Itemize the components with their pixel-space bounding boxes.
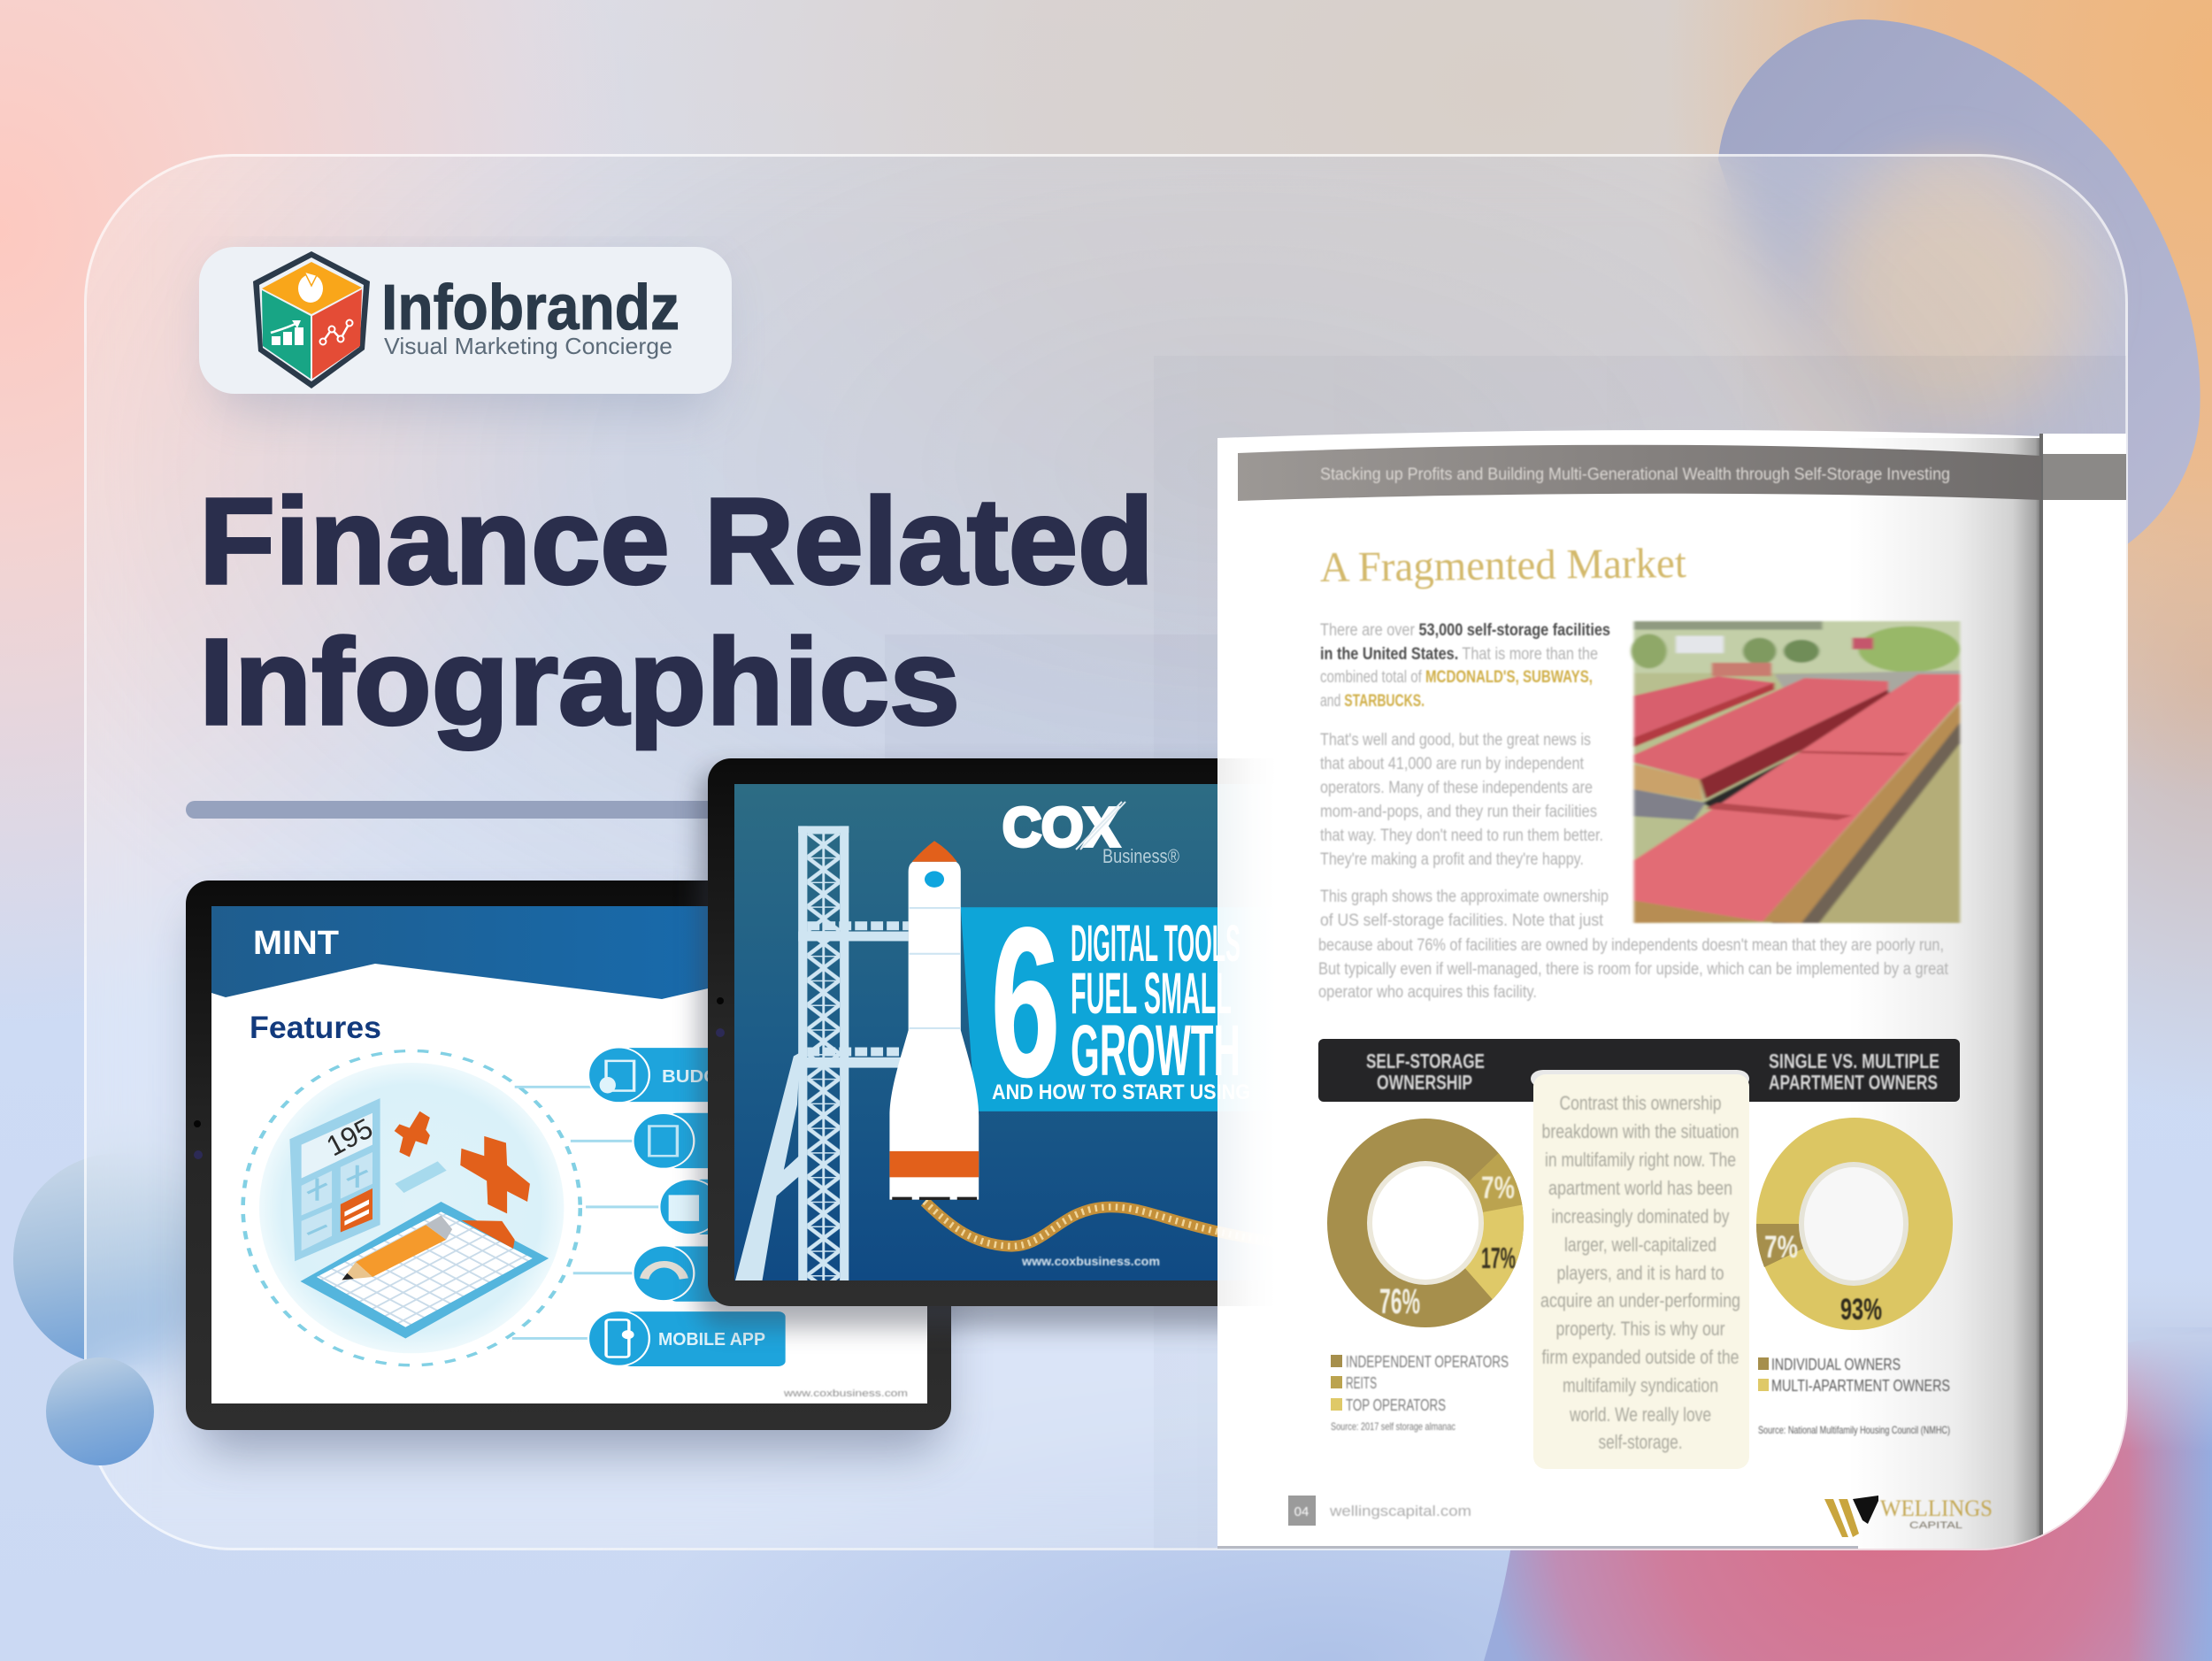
donut headers: APARTMENT OWNERS bbox=[1769, 1071, 1938, 1094]
tablet: Cox Business digital tools: FUEL SMALL bbox=[1071, 960, 1232, 1026]
Mint footer url: www.coxbusiness.com bbox=[783, 1388, 908, 1399]
donut headers: OWNERSHIP bbox=[1377, 1071, 1472, 1094]
body copy: combined total of MCDONALD'S, SUBWAYS, bbox=[1320, 668, 1593, 687]
title: Finance Related bbox=[199, 473, 1154, 610]
body copy: There are over 53,000 self-storage facilities bbox=[1320, 621, 1610, 640]
Business label: Business® bbox=[1102, 845, 1179, 867]
header bar bbox=[1238, 445, 2041, 501]
logo card bbox=[199, 247, 732, 411]
page number and website: 04 bbox=[1294, 1504, 1309, 1519]
cream callout: players, and it is hard to bbox=[1557, 1262, 1724, 1284]
small sphere bbox=[46, 1357, 154, 1465]
body copy: and STARBUCKS. bbox=[1320, 692, 1425, 711]
body copy: mom-and-pops, and they run their facilities bbox=[1320, 803, 1597, 821]
illustration: rocket, gantry and banner bbox=[735, 826, 1294, 1281]
donut headers: SELF-STORAGE bbox=[1366, 1050, 1485, 1073]
cream callout: firm expanded outside of the bbox=[1541, 1346, 1740, 1368]
book: self-storage report spread bbox=[1217, 430, 2131, 1557]
pill labels bbox=[658, 1067, 765, 1350]
heading: A Fragmented Market: A Fragmented Market bbox=[1319, 540, 1687, 591]
Features heading: Features bbox=[250, 1011, 381, 1045]
cream callout: breakdown with the situation bbox=[1541, 1120, 1740, 1142]
cream callout: self-storage. bbox=[1598, 1431, 1683, 1453]
donut chart: self-storage ownership bbox=[1327, 1119, 1524, 1327]
tablet: Cox Business digital tools bbox=[708, 758, 1294, 1306]
page number and website bbox=[1288, 1496, 1471, 1526]
pill labels: BUDGET bbox=[662, 1067, 743, 1087]
headline: GROWTH bbox=[1071, 1011, 1240, 1091]
body copy: That's well and good, but the great news is bbox=[1320, 731, 1591, 750]
donut chart: single vs multiple owners bbox=[1756, 1118, 1953, 1330]
legend: ownership bbox=[1331, 1353, 1509, 1433]
cream callout: property. This is why our bbox=[1555, 1318, 1725, 1340]
legend: apartment owners: Source: National Multifamily Housing Council (NMHC) bbox=[1758, 1424, 1950, 1436]
body copy: because about 76% of facilities are owned by independents doesn't mean that they are poorly run, bbox=[1318, 936, 1944, 955]
title divider bbox=[186, 801, 734, 819]
tablet shadow on Mint tablet bbox=[699, 770, 1274, 1327]
body copy: operator who acquires this facility. bbox=[1318, 983, 1537, 1002]
body copy: operators. Many of these independents are bbox=[1320, 779, 1593, 797]
body copy: that about 41,000 are run by independent bbox=[1320, 755, 1585, 773]
shadow bands behind book bbox=[885, 356, 2128, 1550]
illustration: calculator and clipboard bbox=[243, 1051, 580, 1365]
icon: Infobrandz hexagon cube bbox=[253, 251, 370, 388]
Wellings Capital logo: WELLINGS bbox=[1880, 1496, 1993, 1521]
book edge fade over tablet bbox=[1217, 757, 1276, 1310]
logo tagline: Visual Marketing Concierge bbox=[384, 333, 672, 359]
cream callout: Contrast this ownership bbox=[1559, 1092, 1722, 1114]
pill labels: MOBILE APP bbox=[658, 1330, 765, 1350]
cream callout: acquire an under-performing bbox=[1540, 1289, 1740, 1311]
connector lines and feature pills bbox=[512, 1048, 898, 1366]
tablet: Cox Business digital tools: DIGITAL TOOLS bbox=[1071, 915, 1240, 973]
legend: ownership: TOP OPERATORS bbox=[1346, 1396, 1446, 1414]
legend: ownership: REITS bbox=[1346, 1374, 1377, 1392]
cream callout: world. We really love bbox=[1569, 1403, 1711, 1426]
body copy: But typically even if well-managed, there is room for upside, which can be implemented by a great bbox=[1318, 960, 1949, 979]
donut chart: self-storage ownership: 7% bbox=[1481, 1171, 1515, 1205]
legend: ownership: Source: 2017 self storage almanac bbox=[1331, 1420, 1455, 1433]
donut headers bbox=[1366, 1050, 1939, 1094]
donut chart: self-storage ownership: 17% bbox=[1481, 1242, 1516, 1274]
donut chart: single vs multiple owners: 93% bbox=[1840, 1293, 1882, 1326]
page number and website: wellingscapital.com bbox=[1329, 1503, 1471, 1519]
Cox url: www.coxbusiness.com bbox=[1021, 1254, 1160, 1268]
logo wordmark: Infobrandz bbox=[381, 273, 680, 343]
calculator digits: 195 bbox=[321, 1112, 378, 1162]
big number 6: 6 bbox=[991, 884, 1060, 1120]
headline: AND HOW TO START USING bbox=[992, 1080, 1250, 1104]
headline bbox=[992, 915, 1250, 1104]
legend: ownership: INDEPENDENT OPERATORS bbox=[1346, 1353, 1509, 1371]
body copy: of US self-storage facilities. Note that just bbox=[1320, 911, 1604, 930]
donut chart header band bbox=[1318, 1039, 1960, 1102]
body copy: in the United States. That is more than the bbox=[1320, 645, 1598, 664]
title bbox=[199, 473, 1154, 750]
donut chart: self-storage ownership: 76% bbox=[1379, 1282, 1420, 1321]
cream callout: in multifamily right now. The bbox=[1545, 1149, 1736, 1171]
Wellings Capital logo bbox=[1824, 1496, 1993, 1537]
cream callout: multifamily syndication bbox=[1563, 1374, 1718, 1396]
Mint heading: MINT bbox=[253, 925, 339, 962]
title: Infographics bbox=[199, 614, 960, 750]
legend: apartment owners bbox=[1758, 1356, 1950, 1436]
Mint header banner bbox=[211, 906, 927, 999]
cream callout: larger, well-capitalized bbox=[1564, 1234, 1717, 1256]
page shading near fold bbox=[1897, 438, 2041, 1549]
photo: storage facility with red roofs bbox=[1631, 621, 1960, 923]
body copy: that way. They don't need to run them better. bbox=[1320, 827, 1603, 845]
Cox logo: COX bbox=[1002, 797, 1119, 858]
legend: apartment owners: INDIVIDUAL OWNERS bbox=[1771, 1356, 1901, 1373]
donut chart: single vs multiple owners: 7% bbox=[1764, 1230, 1798, 1265]
legend: apartment owners: MULTI-APARTMENT OWNERS bbox=[1771, 1377, 1950, 1395]
donut headers: SINGLE VS. MULTIPLE bbox=[1769, 1050, 1939, 1073]
body copy: They're making a profit and they're happy. bbox=[1320, 850, 1584, 869]
header bar text: Stacking up Profits and Building Multi-Generational Wealth through Self-Storage Investing bbox=[1320, 465, 1950, 484]
cream callout: apartment world has been bbox=[1548, 1177, 1732, 1199]
tablet: Mint features infographic bbox=[186, 880, 951, 1451]
Wellings Capital logo: CAPITAL bbox=[1909, 1520, 1962, 1531]
body copy bbox=[1318, 621, 1949, 1002]
glass panel bbox=[84, 154, 2128, 1550]
body copy: This graph shows the approximate ownership bbox=[1320, 888, 1609, 906]
cream callout bbox=[1531, 1070, 1749, 1469]
main artwork bbox=[46, 247, 2126, 1549]
cream callout: increasingly dominated by bbox=[1552, 1205, 1729, 1227]
